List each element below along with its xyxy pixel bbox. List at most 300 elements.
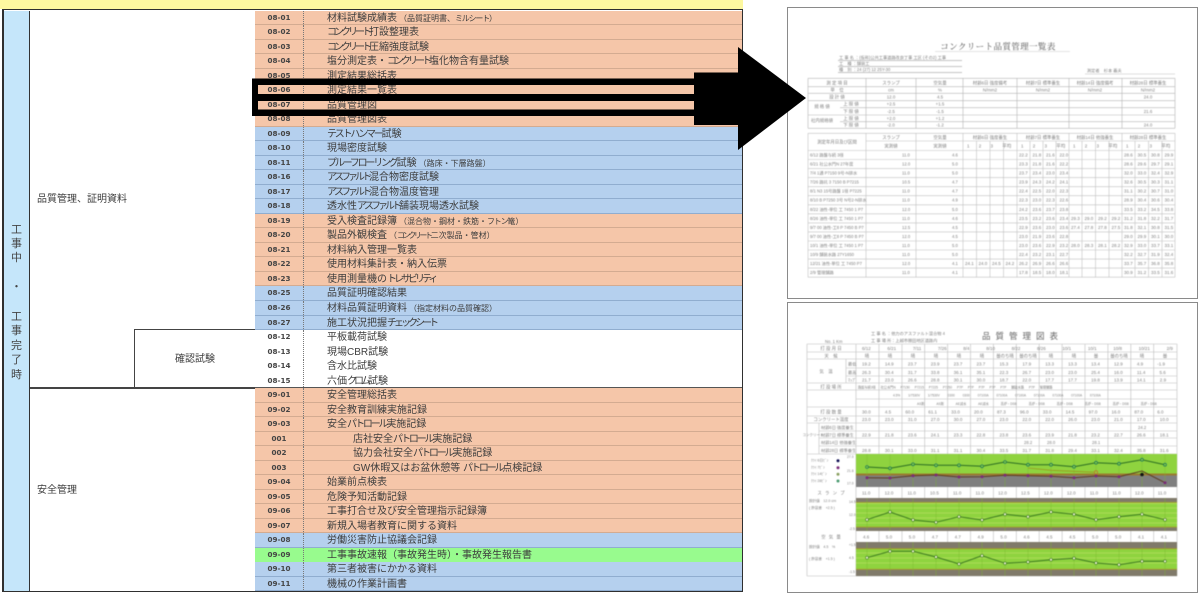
sheet table values: ス ラ ン プ: [817, 490, 845, 496]
sheet table values: 材齢7日 標準養生: [821, 432, 854, 438]
lower table: measurement results: 17.8 18.5 18.0 18.1: [1019, 270, 1069, 275]
project information: 工 種 ：舗装工: [839, 60, 869, 67]
row 08-23: 使用測量機のトレサビリティ: [327, 274, 435, 285]
row 08-14: 含水比試験: [327, 361, 377, 372]
sheet table values: 28.0: [1047, 440, 1056, 445]
lower table: measurement results: 5.0: [952, 252, 958, 257]
upper table: design values: スランプ: [882, 80, 900, 86]
row 09-03: [255, 417, 742, 432]
row 08-17: [255, 185, 742, 199]
list title: コンクリート品質管理一覧表: [940, 40, 1056, 52]
row 08-19: [255, 214, 742, 228]
lower table: measurement results: 4.1: [952, 261, 958, 266]
sheet table values: 晴: [911, 352, 916, 360]
sheet table values: 30.0 4.5 60.0 61.1 33.0 20.0 87.3 96.0 33.0 14.5 97.0 16.0 87.0 6.0: [862, 410, 1164, 414]
sheet table values: コンクリート温度: [813, 416, 849, 423]
air content control chart: 4.5: [849, 556, 854, 560]
lower table: measurement results: 11.0: [902, 243, 911, 248]
lower table: measurement results: 23.0 23.6 22.9 23.2: [1019, 243, 1069, 248]
row 08-20: 08-20: [268, 230, 290, 239]
row 08-20: 製品外観検査（コンクリート二次製品・管材）: [327, 230, 495, 241]
upper table: design values: 12.0: [887, 94, 896, 100]
sheet table values: 6/12 6/21 7/11 7/26 8/4 8/10 8/22 8/26 10/1 10/1 10/8 10/21 2/9: [862, 346, 1173, 351]
phase label vertical text: 時: [11, 368, 22, 380]
row 08-15: 六価クロム試験: [327, 376, 388, 387]
lower table: measurement results: 23.7 23.4 23.0 23.4: [1019, 171, 1069, 176]
lower table: measurement results: 12/21 油性-単位 工 7450 P7: [810, 260, 863, 267]
row 08-18: 透水性アスファルト舗装現場透水試験: [327, 201, 479, 212]
row 08-21: 材料納入管理一覧表: [327, 245, 417, 256]
lower table: measurement results: 12.0: [902, 162, 911, 166]
lower table: measurement results: 6/12 路盤与続 3径: [810, 152, 845, 158]
row 002: 002: [271, 448, 286, 457]
slump control chart: 設計値 12.0 cm: [809, 498, 836, 503]
row 09-11: 09-11: [268, 579, 290, 588]
lower table: measurement results: 6/21 社公水門N 27年度: [810, 160, 854, 168]
upper table: design values: 社内規格値: [811, 117, 834, 124]
lower table: measurement results: 材齢14日 他強養生: [1077, 134, 1114, 141]
lower table: measurement results: 7/26 路坑 3 7150 B P7215: [810, 179, 860, 186]
sheet table values: 天 候: [824, 352, 838, 360]
lower table: measurement results: 23.9 24.3 24.2 24.1: [1019, 180, 1069, 185]
upper table: design values: N/mm2: [1141, 88, 1156, 92]
row 09-07: 新規入場者教育に関する資料: [327, 521, 457, 532]
phase label vertical text: 工: [11, 224, 22, 236]
lower table: measurement results: 材齢7日 標準養生: [1026, 134, 1061, 141]
lower table: measurement results: 32.0 33.0 32.4 32.9: [1124, 171, 1174, 176]
row 08-21: [255, 243, 742, 257]
lower table: measurement results: 22.3 23.0 22.3 22.6: [1019, 198, 1069, 203]
upper table: design values: 材齢7日 標準養生: [1026, 80, 1061, 86]
lower table: measurement results: 12.0: [902, 261, 911, 266]
lower table: measurement results: 5.0: [952, 171, 958, 176]
upper table: design values: +1.2: [936, 116, 945, 121]
air content control chart: [809, 542, 1177, 576]
row 08-02: [255, 25, 742, 40]
upper table: design values: 24.0: [1144, 122, 1153, 128]
row 08-25: 08-25: [268, 288, 290, 297]
upper table: design values: N/mm2: [983, 88, 998, 92]
sheet table values: 23.0 23.0 31.0 27.0 30.0 27.0 23.0 22.0 22.0 26.0 23.0 21.0 17.0 10.0: [862, 417, 1169, 422]
row 09-10: 09-10: [268, 564, 290, 573]
lower table: measurement results: 8/1 N3 15号路盤 1径 P7225: [810, 188, 862, 195]
row 08-12: 08-12: [268, 332, 290, 341]
lower table: measurement results: 32.6 30.5 30.3 31.1: [1124, 180, 1174, 185]
upper table: design values: 材齢6日 強度備考: [973, 80, 1008, 86]
lower table: measurement results: 12.0: [902, 234, 911, 239]
sub-category cell: confirmation tests: [134, 329, 255, 388]
lower table: measurement results: 材齢28日 標準養生: [1130, 134, 1167, 141]
row 08-22: 使用材料集計表・納入伝票: [327, 259, 447, 270]
lower table: measurement results: 12.5: [902, 225, 911, 230]
slump control chart: -2.5: [849, 527, 855, 531]
row 09-01: 09-01: [268, 390, 290, 399]
phase label vertical text: [11, 224, 22, 380]
row 08-10: 現場密度試験: [327, 143, 387, 154]
lower table: measurement results: 11.0: [902, 198, 911, 203]
row 08-10: [255, 141, 742, 156]
header strip: yellow band: [0, 0, 743, 9]
row 09-05: 危険予知活動記録: [327, 492, 407, 503]
row 09-08: 労働災害防止協議会記録: [327, 535, 437, 546]
lower table: measurement results: 5.0: [952, 207, 958, 212]
row 08-09: テストハンマー試験: [327, 129, 402, 140]
upper table: design values: 空気量: [933, 80, 947, 86]
lower table: measurement results: 23.5 23.2 23.6 23.4: [1019, 216, 1069, 221]
row 08-01: 08-01: [268, 12, 290, 22]
sheet table values: 28.2: [1024, 440, 1033, 445]
row 09-04: 始業前点検表: [327, 477, 387, 488]
row 08-07: 08-07: [268, 100, 290, 109]
lower table: measurement results: 28.0 28.3 28.1 28.2: [1071, 243, 1121, 248]
row 08-06: 測定結果一覧表: [327, 85, 397, 96]
lower table: measurement results: 23.0 21.9 23.6 22.8: [1019, 234, 1069, 239]
row 09-02: 安全教育訓練実施記録: [327, 405, 427, 416]
upper table: design values: 上 限 値: [843, 115, 859, 122]
upper table: design values: 4.5: [937, 94, 944, 100]
lower table: measurement results: 24.1 24.0 24.5 24.2: [965, 261, 1015, 266]
row 08-01: 材料試験成績表（品質証明書、ミルシート）: [327, 12, 497, 24]
row 08-27: [255, 316, 742, 330]
row 08-21: 08-21: [268, 245, 290, 254]
phase column: during and after construction: [4, 10, 30, 590]
sheet heading: 品質管理図表: [982, 331, 1063, 341]
lower table: measurement results: 11.0: [902, 152, 911, 158]
row 08-03: コンクリート圧縮強度試験: [327, 42, 429, 53]
lower table: measurement results: 29.0 29.9 30.1 30.0: [1124, 234, 1174, 239]
row 09-04: 09-04: [268, 477, 290, 486]
sheet table values: 4.5% 1/7530V 1/7530V 0300 0300 07100A 07100A 07100A 07100A 07100A 07100A 07100A: [893, 394, 1102, 398]
row 08-12: [255, 330, 742, 345]
lower table: measurement results: 26.2 26.9 26.6 26.6: [1019, 261, 1069, 266]
document list rows: [255, 11, 742, 591]
lower table: measurement results: 24.2 23.6 23.7 23.8: [1019, 207, 1069, 212]
row 09-07: [255, 519, 742, 533]
row 09-06: [255, 504, 742, 519]
row 08-05: [255, 69, 742, 83]
sheet table values: 晴: [934, 352, 939, 360]
sheet table values: 晴: [865, 352, 870, 360]
upper table: design values: 下 限 値: [843, 122, 859, 128]
row 08-13: 08-13: [268, 347, 290, 356]
lower table: measurement results: 28.6 29.6 29.7 29.1: [1124, 162, 1174, 166]
row 09-03: 安全パトロール実施記録: [327, 419, 426, 430]
row 09-10: [255, 562, 742, 577]
row 08-15: [255, 374, 742, 388]
sheet table values: 11.0 12.0 11.0 10.5 11.0 11.0 12.0 12.5 12.0 12.0 11.0 11.0 12.0 11.0: [862, 490, 1167, 496]
row 08-15: 08-15: [268, 376, 290, 385]
row 08-09: [255, 127, 742, 141]
strength trend chart: ｸﾗｲ 28ﾋﾞﾝ: [811, 478, 827, 483]
row 003: GW休暇又はお盆休憩等 パトロール点検記録: [353, 463, 542, 474]
row 09-06: 工事打合せ及び安全管理指示記録簿: [327, 506, 487, 517]
phase label vertical text: 了: [11, 354, 22, 366]
lower table: measurement results: 32.9 33.0 33.7 33.1: [1124, 243, 1174, 248]
sheet heading: 工 事 場 所：上越市棚田地区道路内: [871, 337, 937, 344]
row 08-26: [255, 301, 742, 316]
upper table: design values: 設 計 値: [829, 94, 845, 100]
lower table: measurement results: 4.5: [952, 225, 958, 230]
sheet table values: 晴: [1049, 352, 1054, 360]
row 08-02: 08-02: [268, 27, 290, 36]
lower table: measurement results: 8/10 B P7250 3号 N号2-N排水: [810, 197, 867, 204]
row 09-01: [255, 388, 742, 403]
sheet table values: 晴: [980, 352, 985, 360]
row 08-22: [255, 257, 742, 272]
sheet table values: 28.8 30.1 33.0 31.1 31.1 30.4 33.5 31.7 31.8 29.4 33.1 32.4 35.8 31.6: [862, 448, 1169, 453]
lower table: measurement results: 7/4 1通 P7150 9号-N排水: [810, 170, 858, 177]
upper table: design values: 測 定 項 目: [826, 80, 848, 86]
strength trend chart: [811, 454, 1177, 487]
phase label vertical text: 完: [11, 340, 22, 352]
row 08-03: 08-03: [268, 42, 290, 51]
sheet table values: 路盤与続3径 社公水門N P7150 P7215 P7225 P7250 P7P P7P P7P P7P P7P 舗装水路 P7P 管理舗路: [858, 384, 1053, 390]
upper table: design values: +2.5: [887, 102, 896, 106]
row 08-01: [255, 10, 742, 25]
air content control chart: +1.5: [849, 543, 856, 547]
row 09-08: [255, 533, 742, 548]
row 002: 協力会社安全パトロール実施記録: [353, 448, 492, 459]
slump control chart: ( 許容差 +2.5 ): [809, 505, 835, 510]
lower table: measurement results: 4.6: [952, 152, 958, 158]
row 08-09: 08-09: [268, 129, 290, 138]
lower table: measurement results: 1 2 3 平均: [1021, 142, 1066, 150]
lower table: measurement results: 4.7: [952, 180, 958, 185]
upper table: design values: +2.0: [887, 116, 896, 121]
row 08-23: [255, 272, 742, 286]
row 09-07: 09-07: [268, 521, 290, 530]
air content control chart: ( 許容差 +1.5 ): [809, 556, 835, 561]
sheet heading: No. 1 Km: [825, 339, 843, 344]
row 003: 003: [271, 463, 286, 472]
upper table: design values: 材齢14日 強度備考: [1077, 80, 1114, 86]
sheet table values: 最高: [848, 369, 856, 376]
sheet table values: 曇のち晴: [1019, 352, 1037, 360]
document: quality control chart sheet: [786, 302, 1198, 592]
sheet table values: 22.9 21.8 23.6 24.1 23.3 22.8 23.8 23.6 23.9 21.8 23.2 22.7 26.6 18.1: [862, 432, 1169, 438]
row 08-18: 08-18: [268, 201, 290, 210]
lower table: measurement results: 4.1: [952, 270, 958, 275]
sheet table values: 打 設 場 所: [820, 384, 842, 390]
row 08-02: コンクリート打設整理表: [327, 27, 419, 38]
sheet table values: 材齢6日 強度養生: [821, 424, 854, 431]
project information: [838, 54, 1175, 74]
lower table: measurement results: 4.5: [952, 234, 958, 239]
row 09-10: 第三者被害にかかる資料: [327, 564, 437, 575]
row 09-08: 09-08: [268, 535, 290, 544]
sheet table values: 空 気 量: [821, 534, 841, 540]
lower table: measurement results: 31.1 30.2 30.7 31.0: [1124, 189, 1174, 194]
row 08-26: 08-26: [268, 303, 290, 312]
project information: 種 別 ：24 (27) 12 25Y-30: [839, 66, 891, 73]
sheet table values: ﾏｯﾌﾟ: [848, 376, 856, 384]
sheet table values: [802, 345, 1173, 540]
lower table: measurement results: スランプ: [882, 135, 900, 141]
lower table: measurement results: 実測値: [884, 142, 898, 150]
slump control chart: 12.0: [849, 513, 856, 517]
lower table: measurement results: 8/26 油性-単位 工 7450 1 P7: [810, 215, 864, 222]
row 08-11: 08-11: [268, 158, 290, 167]
sheet table values: 28.1: [1092, 440, 1101, 445]
sheet table values: 気 温: [819, 368, 833, 375]
lower table: measurement results: 8/22 油性-単位 工 7450 1 P7: [810, 206, 864, 213]
sheet table values: 21.7 23.0 26.6 28.8 30.1 30.0 18.7 22.0 17.7 17.7 19.8 13.9 14.1 2.9: [862, 378, 1167, 382]
lower table: measurement results: 11.0: [902, 270, 911, 275]
row 09-09 highlighted: 工事事故速報（事故発生時）・事故発生報告書: [327, 550, 532, 561]
slump control chart: [809, 498, 1177, 531]
row 08-03: [255, 40, 742, 54]
lower table: measurement results: 2/9 管理舗路: [810, 269, 835, 276]
sheet table values: 晴: [957, 352, 962, 360]
lower table: measurement results: 28.6 30.5 30.8 29.9: [1124, 152, 1174, 158]
lower table: measurement results: 33.7 35.7 36.8 35.8: [1124, 261, 1174, 266]
row 08-08: 品質管理図表: [327, 114, 387, 125]
row 09-11: [255, 577, 742, 591]
row 08-04: 08-04: [268, 56, 290, 65]
lower table: measurement results: 33.5 33.2 34.5 33.8: [1124, 207, 1174, 212]
upper table: design values: cm: [888, 88, 894, 92]
table frame: [2, 9, 743, 592]
row 09-04: [255, 475, 742, 490]
sheet table values: 26.3 30.4 31.7 33.8 36.1 35.1 22.3 26.7 23.0 23.0 25.4 16.0 11.4 5.6: [862, 370, 1166, 375]
row 08-17: アスファルト混合物温度管理: [327, 187, 439, 198]
row 08-16: [255, 170, 742, 185]
row 08-11: プルーフローリング試験（路床・下層路盤）: [327, 158, 491, 169]
sheet table values: 曇のち晴: [1110, 352, 1128, 360]
row 08-22: 08-22: [268, 259, 290, 268]
row 09-09 highlighted: 09-09: [268, 550, 290, 559]
lower table: measurement results: 5.0: [952, 162, 958, 166]
row 09-01: 安全管理総括表: [327, 390, 397, 401]
lower table: measurement results: 31.2 31.8 32.2 31.7: [1124, 216, 1174, 221]
document: concrete quality control list: [786, 7, 1198, 298]
upper table: design values: 21.6: [1144, 109, 1153, 114]
row 09-09 highlighted: [255, 548, 742, 562]
divider between categories: [30, 387, 255, 388]
sheet table values: 晴: [888, 352, 893, 360]
lower table: measurement results: 11.0: [902, 171, 911, 176]
lower table: measurement results: 1 2 3 平均: [1073, 142, 1118, 150]
row 08-14: [255, 359, 742, 374]
lower table: measurement results: 23.3 21.8 21.6 22.2: [1019, 162, 1069, 166]
sheet heading: [825, 330, 1063, 344]
lower table: measurement results: 32.2 32.7 31.9 32.4: [1124, 252, 1174, 257]
sheet table values: 打 設 数 量: [820, 408, 842, 416]
row 08-04: [255, 54, 742, 69]
lower table: measurement results: 材齢6日 強度養生: [973, 134, 1008, 141]
lower table: measurement results: 測定年月日及び区間: [817, 138, 857, 146]
row 09-05: 09-05: [268, 492, 290, 501]
row 08-10: 08-10: [268, 143, 290, 152]
sheet table values: 材齢28日 標準養生: [821, 447, 856, 454]
row 08-26: 材料品質証明資料（指定材料の品質確認）: [327, 303, 497, 314]
upper table: design values: 24.0: [1144, 94, 1153, 100]
lower table: measurement results: 10/1 油性-単位 工 7450 1 P7: [810, 242, 864, 249]
lower table: measurement results: 空気量: [933, 134, 947, 141]
row 08-17: 08-17: [268, 187, 290, 196]
lower table: measurement results: 22.4 22.5 22.0 22.3: [1019, 189, 1069, 194]
upper table: design values: 下 限 値: [843, 108, 859, 115]
lower table: measurement results: 4.6: [952, 216, 958, 221]
sheet table values: 曇: [1163, 352, 1168, 360]
sheet table values: 曇: [1094, 352, 1099, 360]
lower table: measurement results: 11.0: [902, 252, 911, 257]
lower table: measurement results: 4.7: [952, 189, 958, 194]
air content control chart: -1.5: [849, 570, 855, 574]
phase label vertical text: 事: [11, 324, 22, 336]
row 08-16: 08-16: [268, 172, 290, 181]
upper table: design values: %: [938, 88, 942, 92]
strength trend chart: ｸﾗｲ 6日ﾋﾞﾝ: [811, 458, 829, 462]
lower table: measurement results: 9/7 00 油性-工8 P 7450 B P7: [810, 224, 864, 231]
lower table: measurement results: 11.0: [902, 189, 911, 194]
upper table: design values: -2.0: [887, 122, 895, 128]
lower table: measurement results: 1 2 3 平均: [967, 142, 1012, 150]
row 001: [255, 432, 742, 446]
row 08-18: [255, 199, 742, 214]
row 09-06: 09-06: [268, 506, 290, 515]
row 08-25: [255, 286, 742, 301]
lower table: measurement results: 9/7 00 油性-工8 P 7450 B P7: [810, 233, 864, 240]
lower table: measurement results: [808, 133, 1175, 277]
upper table: design values: -1.5: [936, 109, 944, 114]
sheet heading: 工 事 名 ：他力のアスファルト混合物 4: [871, 330, 946, 337]
sheet table values: 24.2: [1138, 425, 1147, 430]
category label: quality management: 品質管理、証明資料: [37, 194, 127, 205]
sub-category cell: confirmation tests: 確認試験: [175, 354, 215, 365]
row 08-11: [255, 156, 742, 170]
project information: 工 事 名 ：(仮称)公共工事道路改良丁事 工区 (その2) 工事: [839, 54, 946, 61]
project information: 測定者 杉本 義夫: [1087, 67, 1122, 74]
lower table: measurement results: 31.8 32.1 30.8 31.5: [1124, 225, 1174, 230]
sheet table values: 晴: [1140, 352, 1145, 360]
upper table: design values: 材齢28日 標準養生: [1130, 80, 1167, 86]
row 08-07: [255, 98, 742, 112]
row 08-05: 測定結果総括表: [327, 71, 397, 82]
row 08-08: 08-08: [268, 114, 290, 123]
lower table: measurement results: 22.9 23.6 23.0 23.6: [1019, 225, 1069, 230]
upper table: design values: 規 格 値: [814, 103, 830, 110]
row 001: 店社安全パトロール実施記録: [353, 434, 472, 445]
upper table: design values: [808, 78, 1175, 128]
row 08-06: 08-06: [268, 85, 290, 94]
slump control chart: 14.5: [849, 500, 856, 504]
row 08-13: 現場CBR試験: [327, 347, 388, 358]
row 08-05: 08-05: [268, 71, 290, 80]
upper table: design values: 単 位: [830, 86, 844, 94]
sheet table values: AS剤 AS剤 AE減水 AE減水 高炉・DSB 高炉・DSB 高炉・DSB 高炉・DSB 高炉・DSB 高炉・DSB: [917, 401, 1157, 406]
phase label vertical text: 事: [11, 238, 22, 250]
lower table: measurement results: 4.9: [952, 198, 958, 203]
sheet table grid: [807, 344, 1177, 576]
row 09-03: 09-03: [268, 419, 290, 428]
upper table: design values: -2.5: [887, 109, 895, 114]
sheet table values: 曇のち晴: [996, 352, 1014, 360]
lower table: measurement results: 11.0: [902, 216, 911, 221]
strength trend chart: ｸﾗｲ 14ﾋﾞﾝ: [811, 471, 827, 476]
lower table: measurement results: 22.4 23.2 23.1 22.7: [1019, 252, 1069, 257]
strength trend chart: 21.6: [847, 469, 854, 473]
row 08-04: 塩分測定表・コンクリート塩化物含有量試験: [327, 56, 509, 67]
row 003: [255, 461, 742, 475]
air content control chart: 設計値 4.5 %: [809, 544, 836, 549]
sheet table values: 材齢14日 他強養生: [821, 439, 856, 446]
lower table: measurement results: 10.5: [902, 180, 911, 185]
sheet table values: 最低: [848, 360, 857, 368]
lower table: measurement results: 27.4 27.8 27.8 27.5: [1071, 225, 1121, 230]
upper table: design values: N/mm2: [1036, 88, 1051, 92]
lower table: measurement results: 29.3 29.0 29.2 29.2: [1071, 216, 1121, 221]
